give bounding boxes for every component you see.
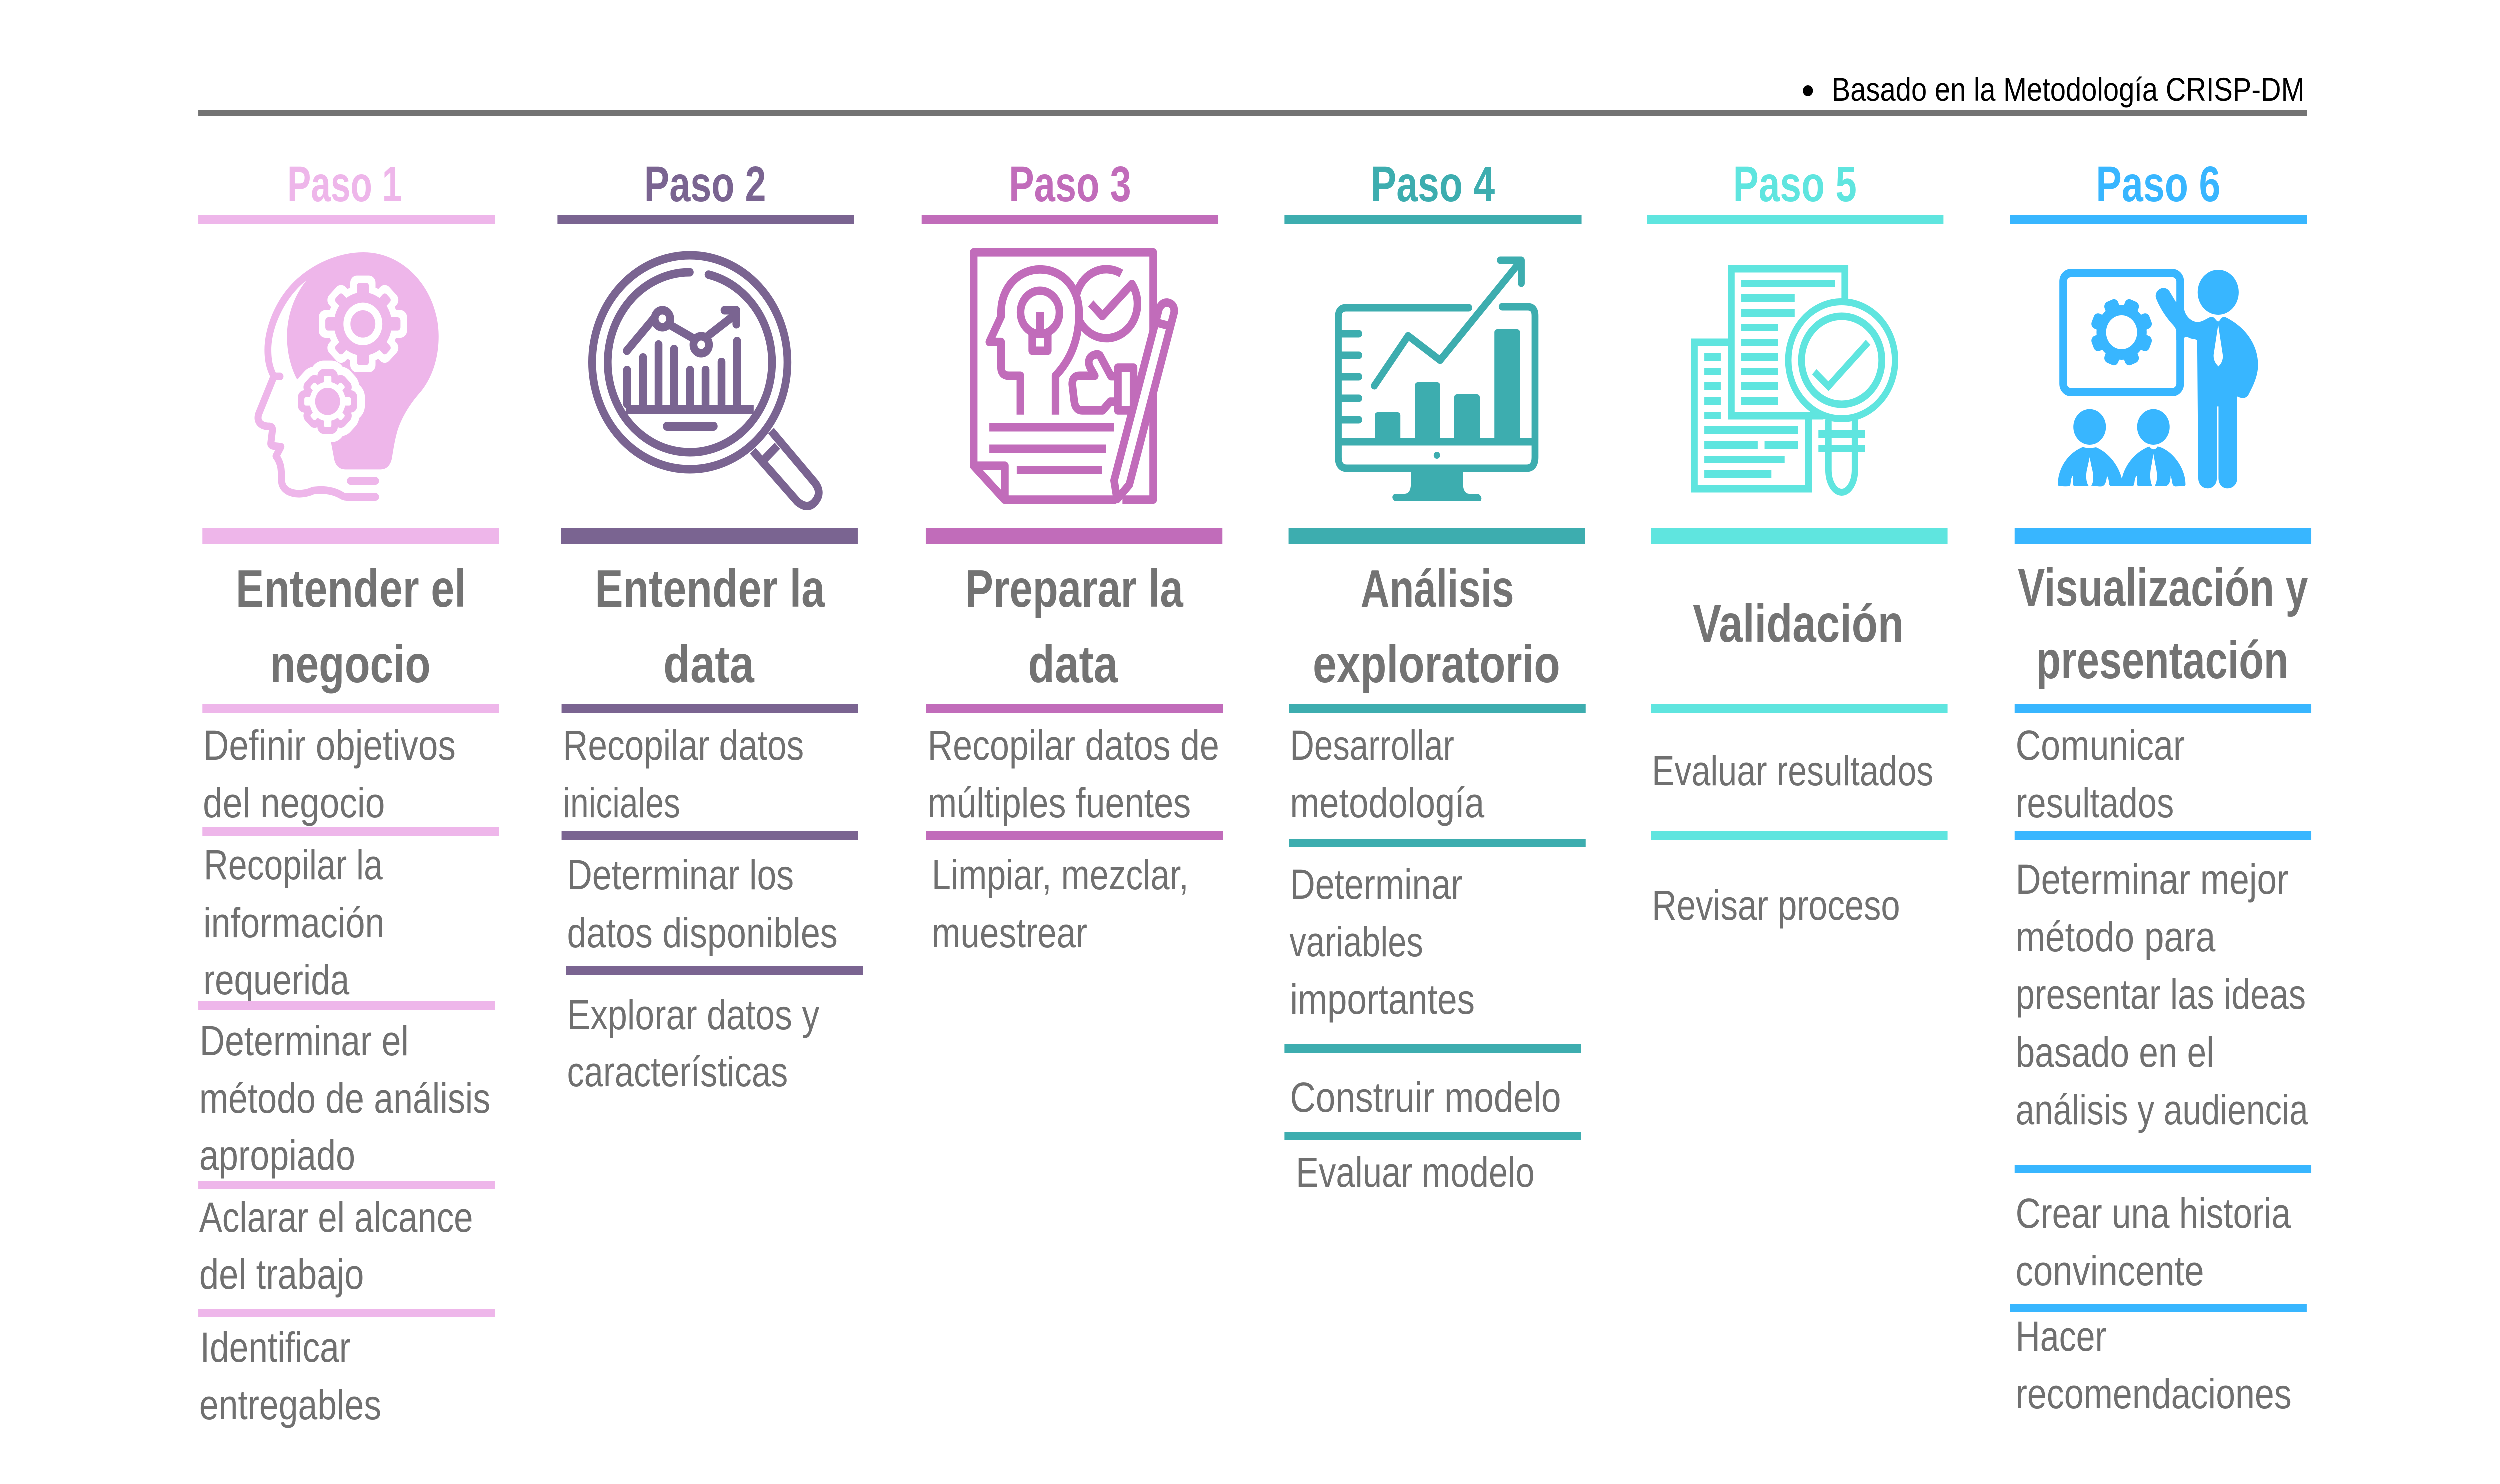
task list: paso 5: Revisar proceso	[1652, 882, 1900, 930]
task list: paso 6: Crear una historia	[2016, 1190, 2291, 1238]
panel: paso 4	[1284, 156, 1586, 1196]
heading: Análisis exploratorio	[1313, 559, 1560, 694]
heading: Análisis exploratorio: Análisis	[1361, 559, 1514, 618]
step label: Paso 1: Paso 1	[288, 156, 402, 212]
task list: paso 1: método de análisis	[200, 1076, 490, 1122]
icon: documents with magnifying glass and check	[1694, 269, 1896, 492]
task list: paso 1: Aclarar el alcance	[200, 1194, 474, 1242]
step label: Paso 3: Paso 3	[1009, 156, 1132, 212]
task list: paso 1: del trabajo	[200, 1252, 364, 1298]
task list: paso 6: basado en el	[2016, 1030, 2214, 1076]
task list: paso 1	[198, 722, 500, 1429]
task list: paso 6	[2010, 722, 2312, 1418]
heading: Entender el negocio: negocio	[270, 634, 431, 694]
step label: Paso 6: Paso 6	[2096, 156, 2220, 212]
heading: Validación: Validación	[1693, 594, 1904, 654]
task list: paso 1: Identificar	[200, 1324, 351, 1372]
task list: paso 6: Determinar mejor	[2016, 856, 2288, 904]
task list: paso 4	[1284, 722, 1586, 1196]
panel: paso 6	[2010, 156, 2312, 1418]
task list: paso 1: Definir objetivos	[204, 722, 456, 770]
icon: magnifying glass over chart	[592, 256, 819, 506]
task list: paso 3: Recopilar datos de	[928, 722, 1220, 770]
task list: paso 2: datos disponibles	[568, 910, 838, 957]
heading: Entender la data	[595, 559, 826, 694]
task list: paso 6: método para	[2016, 914, 2216, 961]
task list: paso 2: Determinar los	[568, 852, 794, 899]
heading: Entender el negocio	[236, 559, 466, 694]
task list: paso 6: Hacer	[2016, 1314, 2106, 1360]
task list: paso 4: Construir modelo	[1290, 1074, 1561, 1122]
task list: paso 6: Comunicar	[2016, 722, 2185, 770]
step label: Paso 4: Paso 4	[1371, 156, 1495, 212]
task list: paso 4: Determinar	[1290, 862, 1462, 908]
heading: Visualización y presentación	[2018, 558, 2308, 690]
task list: paso 4: Desarrollar	[1290, 722, 1454, 770]
panel: paso 3	[922, 156, 1223, 957]
task list: paso 3: múltiples fuentes	[928, 780, 1191, 827]
heading: Entender la data: data	[664, 634, 755, 694]
heading: Visualización y presentación: presentación	[2036, 630, 2288, 690]
icon: document with head, bulb, thumb and pencil	[974, 252, 1174, 500]
task list: paso 1: del negocio	[203, 780, 385, 827]
panel: paso 1	[198, 156, 500, 1429]
heading: Entender el negocio: Entender el	[236, 559, 466, 618]
task list: paso 1: información	[204, 900, 384, 947]
step label: Paso 5: Paso 5	[1734, 156, 1857, 212]
task list: paso 2: Explorar datos y	[568, 992, 820, 1039]
task list: paso 2: Recopilar datos	[563, 722, 804, 770]
icon: presenter at board with audience	[2058, 270, 2258, 488]
step label: Paso 2: Paso 2	[644, 156, 766, 212]
heading: Entender la data: Entender la	[595, 559, 826, 618]
icon: monitor with growth chart	[1338, 260, 1535, 501]
task list: paso 5: Evaluar resultados	[1652, 748, 1934, 795]
task list: paso 4: importantes	[1290, 976, 1475, 1024]
task list: paso 4: metodología	[1290, 780, 1484, 827]
task list: paso 1: Recopilar la	[204, 842, 383, 889]
task list: paso 6: presentar las ideas	[2016, 972, 2306, 1018]
task list: paso 6: convincente	[2016, 1248, 2204, 1295]
task list: paso 3: Limpiar, mezclar,	[932, 852, 1189, 899]
task list: paso 6: resultados	[2016, 780, 2174, 827]
task list: paso 4: Evaluar modelo	[1296, 1150, 1535, 1196]
panel: paso 2	[558, 156, 863, 1096]
task list: paso 3: muestrear	[932, 910, 1088, 957]
task list: paso 1: Determinar el	[200, 1018, 409, 1065]
source note: Basado en la Metodología CRISP-DM	[1832, 72, 2304, 108]
heading: Visualización y presentación: Visualización y	[2018, 558, 2308, 618]
task list: paso 6: recomendaciones	[2016, 1371, 2292, 1418]
task list: paso 2	[562, 722, 863, 1096]
task list: paso 2: características	[568, 1049, 788, 1096]
task list: paso 1: entregables	[200, 1382, 382, 1429]
icon: head with gears and light bulb	[258, 252, 439, 497]
task list: paso 5	[1651, 748, 1948, 930]
task list: paso 6: análisis y audiencia	[2016, 1087, 2308, 1134]
panel: paso 5	[1647, 156, 1948, 930]
heading: Preparar la data: data	[1028, 634, 1119, 694]
task list: paso 3	[926, 722, 1223, 957]
task list: paso 4: variables	[1290, 919, 1424, 966]
task list: paso 1: requerida	[204, 957, 350, 1004]
heading: Preparar la data	[966, 559, 1184, 694]
task list: paso 1: apropiado	[200, 1132, 356, 1180]
heading: Preparar la data: Preparar la	[966, 559, 1184, 618]
task list: paso 2: iniciales	[563, 780, 680, 827]
heading: Análisis exploratorio: exploratorio	[1313, 634, 1560, 694]
